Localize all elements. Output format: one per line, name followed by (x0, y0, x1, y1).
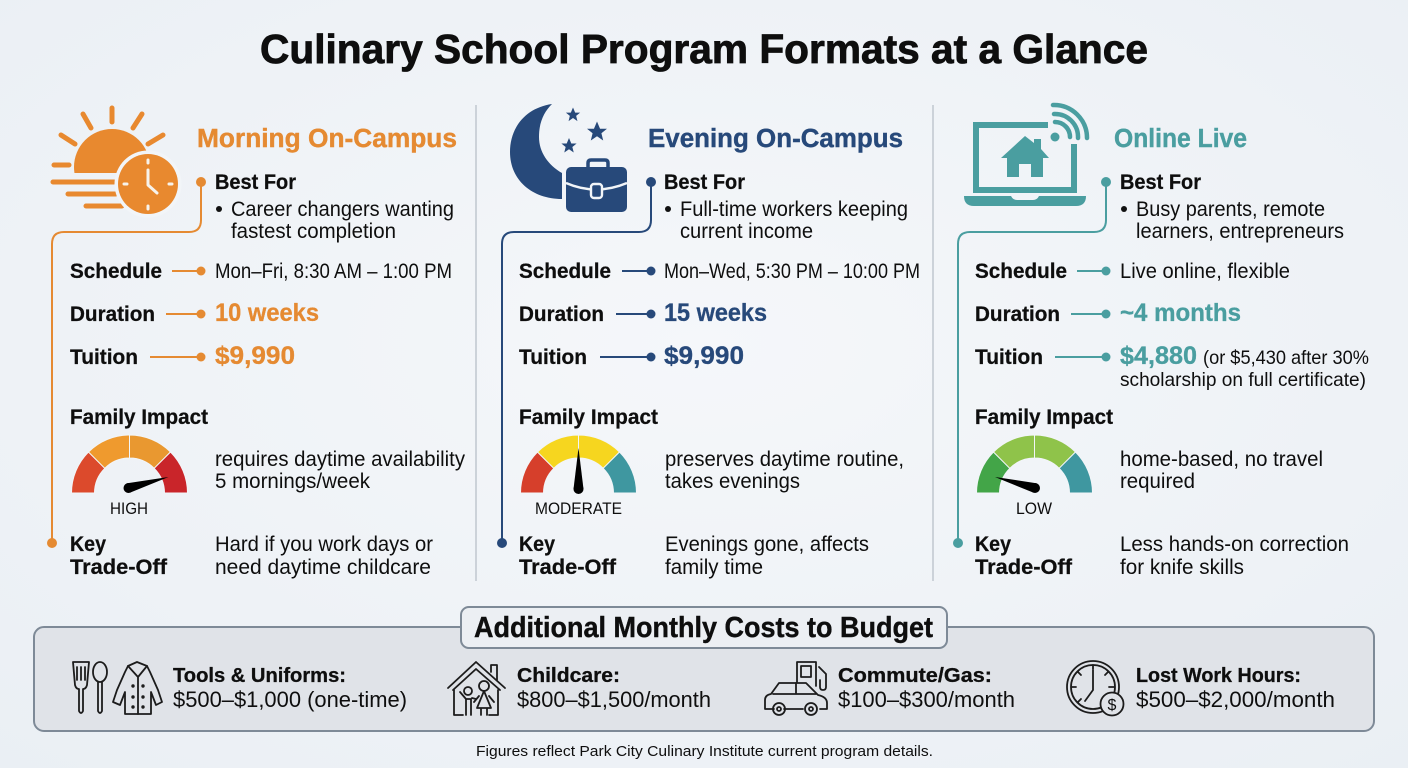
heading: evening on-campus: Evening On-Campus (648, 125, 903, 153)
duration row: 15 weeks (664, 299, 767, 327)
tuition row: Tuition (975, 346, 1043, 369)
duration row (519, 299, 767, 327)
tuition row: $4,880 (1120, 342, 1197, 370)
panel: online live (953, 105, 1369, 579)
key trade-off: Key (519, 533, 555, 556)
icon: car and gas pump (765, 662, 827, 715)
key trade-off: Trade-Off (519, 556, 617, 579)
duration row (70, 299, 319, 327)
text: childcare: $800–$1,500/month (517, 687, 711, 712)
title: Culinary School Program Formats at a Glance (260, 26, 1148, 72)
best for: learners, entrepreneurs (1136, 220, 1344, 243)
schedule row: Schedule (70, 260, 162, 283)
gauge: moderate (520, 435, 636, 518)
tuition row: (or $5,430 after 30% (1203, 347, 1369, 369)
key trade-off (519, 533, 869, 579)
tuition row: Tuition (519, 346, 587, 369)
best for: current income (680, 220, 813, 243)
best for (215, 171, 454, 243)
icon: sun and clock (53, 108, 182, 218)
key trade-off (975, 533, 1349, 579)
duration row: ~4 months (1120, 299, 1241, 327)
key trade-off: Trade-Off (975, 556, 1073, 579)
text: tools and uniforms: Tools & Uniforms: (173, 665, 346, 687)
family impact label: Family Impact (70, 406, 208, 429)
duration row (975, 299, 1241, 327)
best for: Full-time workers keeping (680, 198, 908, 221)
key trade-off (70, 533, 433, 579)
text: commute and gas (838, 665, 1015, 712)
gauge: low: LOW (1016, 500, 1052, 518)
duration row: Duration (519, 303, 604, 326)
tuition row: $9,990 (215, 342, 295, 370)
heading: online live: Online Live (1114, 125, 1247, 153)
panel heading tab: Additional Monthly Costs to Budget (474, 612, 933, 644)
icon: laptop with house and wifi (964, 105, 1087, 206)
family impact description: takes evenings (665, 470, 800, 493)
icon: spatula, spoon, chef jacket (73, 662, 162, 714)
schedule row (70, 260, 452, 283)
panel: additional monthly costs (34, 607, 1374, 731)
family impact description (665, 448, 904, 493)
best for: Busy parents, remote (1136, 198, 1325, 221)
gauge: moderate: MODERATE (535, 500, 622, 518)
text: lost work hours (1136, 665, 1335, 712)
family impact label: Family Impact (519, 406, 658, 429)
tuition row: $9,990 (664, 342, 744, 370)
icon: house with children (448, 662, 505, 715)
schedule row: Schedule (519, 260, 611, 283)
key trade-off: Hard if you work days or (215, 533, 433, 556)
best for: Best For (215, 171, 296, 194)
family impact description: preserves daytime routine, (665, 448, 904, 471)
key trade-off: need daytime childcare (215, 556, 431, 579)
family impact description (1120, 448, 1323, 493)
tuition row: scholarship on full certificate) (1120, 369, 1366, 391)
connector line (953, 177, 1111, 548)
text: childcare: Childcare: (517, 665, 620, 687)
best for: Best For (1120, 171, 1201, 194)
key trade-off: for knife skills (1120, 556, 1244, 579)
icon: moon and briefcase (510, 104, 627, 212)
family impact description: home-based, no travel (1120, 448, 1323, 471)
best for: Best For (664, 171, 745, 194)
connector line (47, 177, 206, 548)
key trade-off: Less hands-on correction (1120, 533, 1349, 556)
family impact label: Family Impact (975, 406, 1113, 429)
schedule row: Live online, flexible (1120, 260, 1290, 283)
text: childcare (517, 665, 711, 712)
connector line (497, 177, 656, 548)
duration row: 10 weeks (215, 299, 319, 327)
text: commute and gas: $100–$300/month (838, 687, 1015, 712)
tuition row (70, 342, 295, 370)
key trade-off: Evenings gone, affects (665, 533, 869, 556)
panel: evening on-campus (497, 104, 920, 579)
family impact description: 5 mornings/week (215, 470, 370, 493)
text: tools and uniforms: $500–$1,000 (one-time) (173, 687, 407, 712)
schedule row: Mon–Wed, 5:30 PM – 10:00 PM (664, 260, 920, 283)
family impact description: required (1120, 470, 1195, 493)
icon: clock with dollar: $ (1108, 697, 1117, 714)
key trade-off: Key (975, 533, 1011, 556)
icon: clock with dollar (1067, 661, 1124, 716)
key trade-off: Trade-Off (70, 556, 168, 579)
text: lost work hours: Lost Work Hours: (1136, 665, 1301, 687)
text: lost work hours: $500–$2,000/month (1136, 687, 1335, 712)
footnote: Figures reflect Park City Culinary Institute current program details. (476, 743, 933, 760)
tuition row (975, 342, 1369, 391)
heading: morning on-campus: Morning On-Campus (197, 125, 457, 153)
key trade-off: family time (665, 556, 763, 579)
best for (664, 171, 908, 243)
gauge: low (976, 435, 1092, 518)
tuition row: Tuition (70, 346, 138, 369)
best for (1120, 171, 1344, 243)
text: commute and gas: Commute/Gas: (838, 665, 992, 687)
schedule row: Mon–Fri, 8:30 AM – 1:00 PM (215, 260, 452, 283)
duration row: Duration (975, 303, 1060, 326)
family impact description: requires daytime availability (215, 448, 465, 471)
text: tools and uniforms (173, 665, 407, 712)
panel: morning on-campus (47, 108, 465, 579)
best for: Career changers wanting (231, 198, 454, 221)
gauge: high: HIGH (110, 500, 148, 518)
key trade-off: Key (70, 533, 106, 556)
best for: fastest completion (231, 220, 396, 243)
schedule row (519, 260, 920, 283)
duration row: Duration (70, 303, 155, 326)
gauge: high (72, 435, 188, 518)
schedule row: Schedule (975, 260, 1067, 283)
tuition row (519, 342, 744, 370)
schedule row (975, 260, 1290, 283)
family impact description (215, 448, 465, 493)
